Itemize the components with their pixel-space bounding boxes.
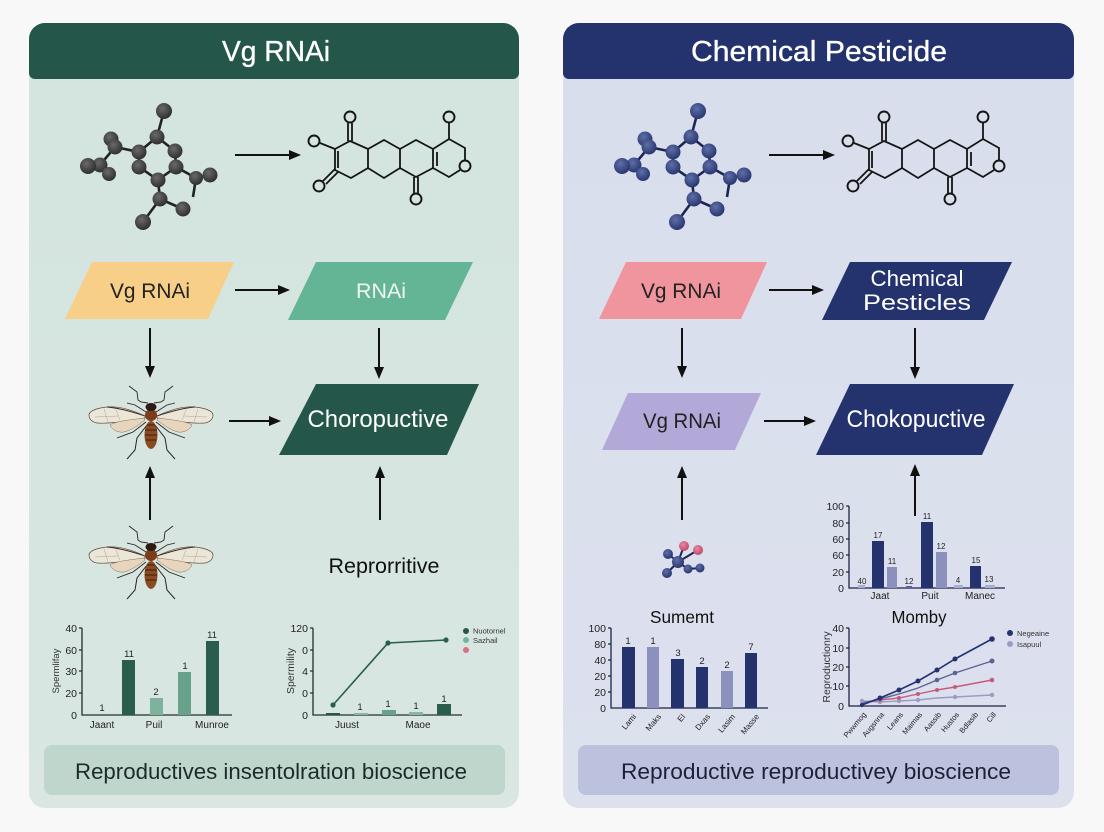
line chart: lower right: Bdlasib — [957, 710, 980, 735]
arrow — [769, 289, 813, 291]
legend — [463, 626, 506, 653]
bar chart: left: 60 — [65, 645, 77, 657]
arrow: molecule to structure — [235, 154, 290, 156]
box: Vg RNAi: Vg RNAi — [110, 279, 190, 303]
bar chart: upper right — [826, 501, 1005, 602]
panel: Vg RNAi — [29, 23, 519, 808]
line chart: lower right: Reproductionry — [821, 631, 833, 703]
line chart: lower right: 10 — [832, 643, 844, 655]
bar chart: lower right: 20 — [594, 671, 606, 683]
box: Vg RNAi — [65, 262, 234, 319]
icon: insect — [89, 526, 213, 599]
bar chart: lower right: 40 — [594, 655, 606, 667]
line chart: lower right: Pwwmog — [842, 710, 868, 739]
bar chart: lower right — [588, 623, 768, 736]
arrow — [235, 289, 279, 291]
box: RNAi: RNAi — [356, 279, 406, 303]
combo chart: left: 1 — [357, 702, 363, 713]
label: Momby: Momby — [892, 607, 947, 627]
heading: Vg RNAi — [29, 23, 519, 79]
bar chart: left: 30 — [65, 666, 77, 678]
bar chart: left: 40 — [65, 623, 77, 635]
box: Vg RNAi pink — [599, 262, 767, 319]
callout: bottom caption — [578, 745, 1059, 795]
bar chart: left: 0 — [71, 710, 77, 722]
bar chart: left — [51, 623, 232, 731]
bar chart: left: 11 — [124, 649, 134, 660]
box: Vg RNAi purple: Vg RNAi — [643, 410, 721, 433]
heading: Chemical Pesticide — [563, 23, 1074, 79]
legend: Nuotornel — [473, 626, 506, 636]
bar chart: left: 1 — [99, 703, 105, 714]
combo chart: left: 1 — [413, 701, 419, 712]
combo chart: left: 1 — [385, 699, 391, 710]
line chart: lower right: 10 — [832, 681, 844, 693]
box: Chokopuctive: Chokopuctive — [846, 406, 986, 433]
bar chart: lower right: Maks — [644, 712, 663, 733]
bar chart: lower right: 1 — [650, 636, 656, 647]
callout: bottom caption: Reproductives insentolration bioscience — [75, 759, 467, 784]
bar chart: upper right: Jaat — [871, 591, 890, 602]
bar chart: left: Puil — [146, 720, 162, 731]
combo chart: left: Juust — [335, 720, 359, 731]
legend: Isapuul — [1017, 640, 1042, 649]
bar chart: upper right: 40 — [858, 577, 867, 586]
heading: Vg RNAi: Vg RNAi — [222, 36, 330, 68]
combo chart: left: 0 — [302, 645, 308, 657]
bar chart: upper right: 0 — [838, 583, 844, 595]
combo chart: left: Spermility — [285, 647, 297, 694]
icon: insect — [89, 386, 213, 459]
box: Chemical Pesticides: Pesticles — [863, 290, 971, 315]
bar chart: upper right: 12 — [905, 577, 914, 586]
legend — [1007, 629, 1049, 649]
heading: Chemical Pesticide: Chemical Pesticide — [691, 36, 947, 68]
panel: Chemical Pesticide — [563, 23, 1074, 808]
icon: skeletal structure — [842, 112, 1004, 204]
bar chart: upper right: 11 — [888, 557, 897, 566]
box: Vg RNAi purple — [602, 393, 761, 450]
bar chart: lower right: Lasim — [717, 712, 737, 734]
bar chart: lower right: 7 — [748, 642, 754, 653]
bar chart: upper right: 80 — [832, 518, 844, 530]
box: Chokopuctive — [816, 384, 1014, 455]
line chart: lower right: Hustos — [939, 710, 961, 734]
line chart: lower right: 40 — [832, 623, 844, 635]
icon: ball-and-stick molecule — [80, 103, 218, 230]
line chart: lower right: Maimas — [900, 710, 924, 736]
bar chart: lower right: Lami — [620, 712, 638, 731]
bar chart: lower right: 3 — [675, 648, 681, 659]
bar chart: left: 2 — [153, 687, 159, 698]
bar chart: upper right: Puit — [921, 591, 939, 602]
bar chart: left: Munroe — [195, 720, 229, 731]
arrow — [149, 477, 151, 520]
bar chart: lower right: Dxas — [694, 712, 712, 732]
combo chart: left: 120 — [290, 623, 308, 635]
bar chart: lower right: 2 — [724, 660, 730, 671]
bar chart: upper right: 100 — [826, 501, 844, 513]
icon: small molecule — [662, 541, 704, 578]
bar chart: upper right: 20 — [832, 567, 844, 579]
bar chart: left: 11 — [207, 630, 217, 641]
bar chart: upper right: 11 — [923, 512, 932, 521]
arrow — [379, 477, 381, 520]
arrow — [764, 420, 805, 422]
arrow — [914, 475, 916, 516]
bar chart: lower right: Masse — [739, 712, 761, 736]
combo chart: left: Maoe — [405, 720, 431, 731]
box: Chemical Pesticides — [822, 262, 1012, 320]
arrow — [681, 328, 683, 367]
arrow — [681, 477, 683, 520]
bar chart: lower right: 80 — [594, 639, 606, 651]
bar chart: upper right: Manec — [965, 591, 995, 602]
label: Reprorritive: Reprorritive — [328, 555, 440, 578]
line chart: lower right: Leans — [885, 710, 905, 732]
bar chart: left: Spermlifay — [51, 648, 62, 693]
line chart: lower right: Augsnna — [860, 710, 887, 739]
combo chart: left: 0 — [302, 688, 308, 700]
box: Chemical Pesticides: Chemical — [870, 266, 964, 291]
bar chart: lower right: 100 — [588, 623, 606, 635]
box: Choropuctive: Choropuctive — [308, 406, 448, 433]
arrow — [229, 420, 270, 422]
arrow — [149, 328, 151, 367]
bar chart: lower right: El — [676, 712, 687, 724]
legend: Negeaine — [1017, 629, 1049, 638]
bar chart: upper right: 15 — [972, 556, 981, 565]
bar chart: upper right: 12 — [937, 542, 946, 551]
bar chart: upper right: 60 — [832, 550, 844, 562]
legend: Sazhail — [473, 636, 498, 645]
combo chart: left: 0 — [302, 710, 308, 722]
combo chart: left: 1 — [441, 694, 447, 705]
box: Vg RNAi pink: Vg RNAi — [641, 279, 721, 303]
icon: ball-and-stick molecule — [614, 103, 752, 230]
arrow — [378, 328, 380, 368]
bar chart: lower right: 1 — [625, 636, 631, 647]
bar chart: upper right: 60 — [832, 534, 844, 546]
bar chart: left: 1 — [182, 661, 188, 672]
arrow — [914, 328, 916, 368]
box: RNAi — [288, 262, 473, 320]
callout: bottom caption — [44, 745, 505, 795]
combo chart: left: 4 — [302, 666, 308, 678]
bar chart: left: 20 — [65, 688, 77, 700]
box: Choropuctive — [279, 384, 479, 455]
bar chart: lower right: 20 — [594, 687, 606, 699]
bar chart: left: Jaant — [90, 720, 114, 731]
bar chart: upper right: 17 — [874, 531, 883, 540]
label: Sumemt: Sumemt — [650, 607, 714, 627]
line chart: lower right — [821, 623, 1049, 739]
icon: skeletal structure — [308, 112, 470, 204]
line chart: lower right: Cill — [985, 710, 998, 724]
bar chart: upper right: 4 — [956, 576, 961, 585]
combo chart: left — [285, 623, 506, 731]
bar chart: lower right: 0 — [600, 703, 606, 715]
bar chart: lower right: 2 — [699, 656, 705, 667]
line chart: lower right: 0 — [838, 701, 844, 713]
line chart: lower right: Aassib — [922, 710, 943, 733]
line chart: lower right: 20 — [832, 662, 844, 674]
arrow: molecule to structure — [769, 154, 824, 156]
callout: bottom caption: Reproductive reproductivey bioscience — [621, 759, 1011, 784]
bar chart: upper right: 13 — [985, 575, 994, 584]
